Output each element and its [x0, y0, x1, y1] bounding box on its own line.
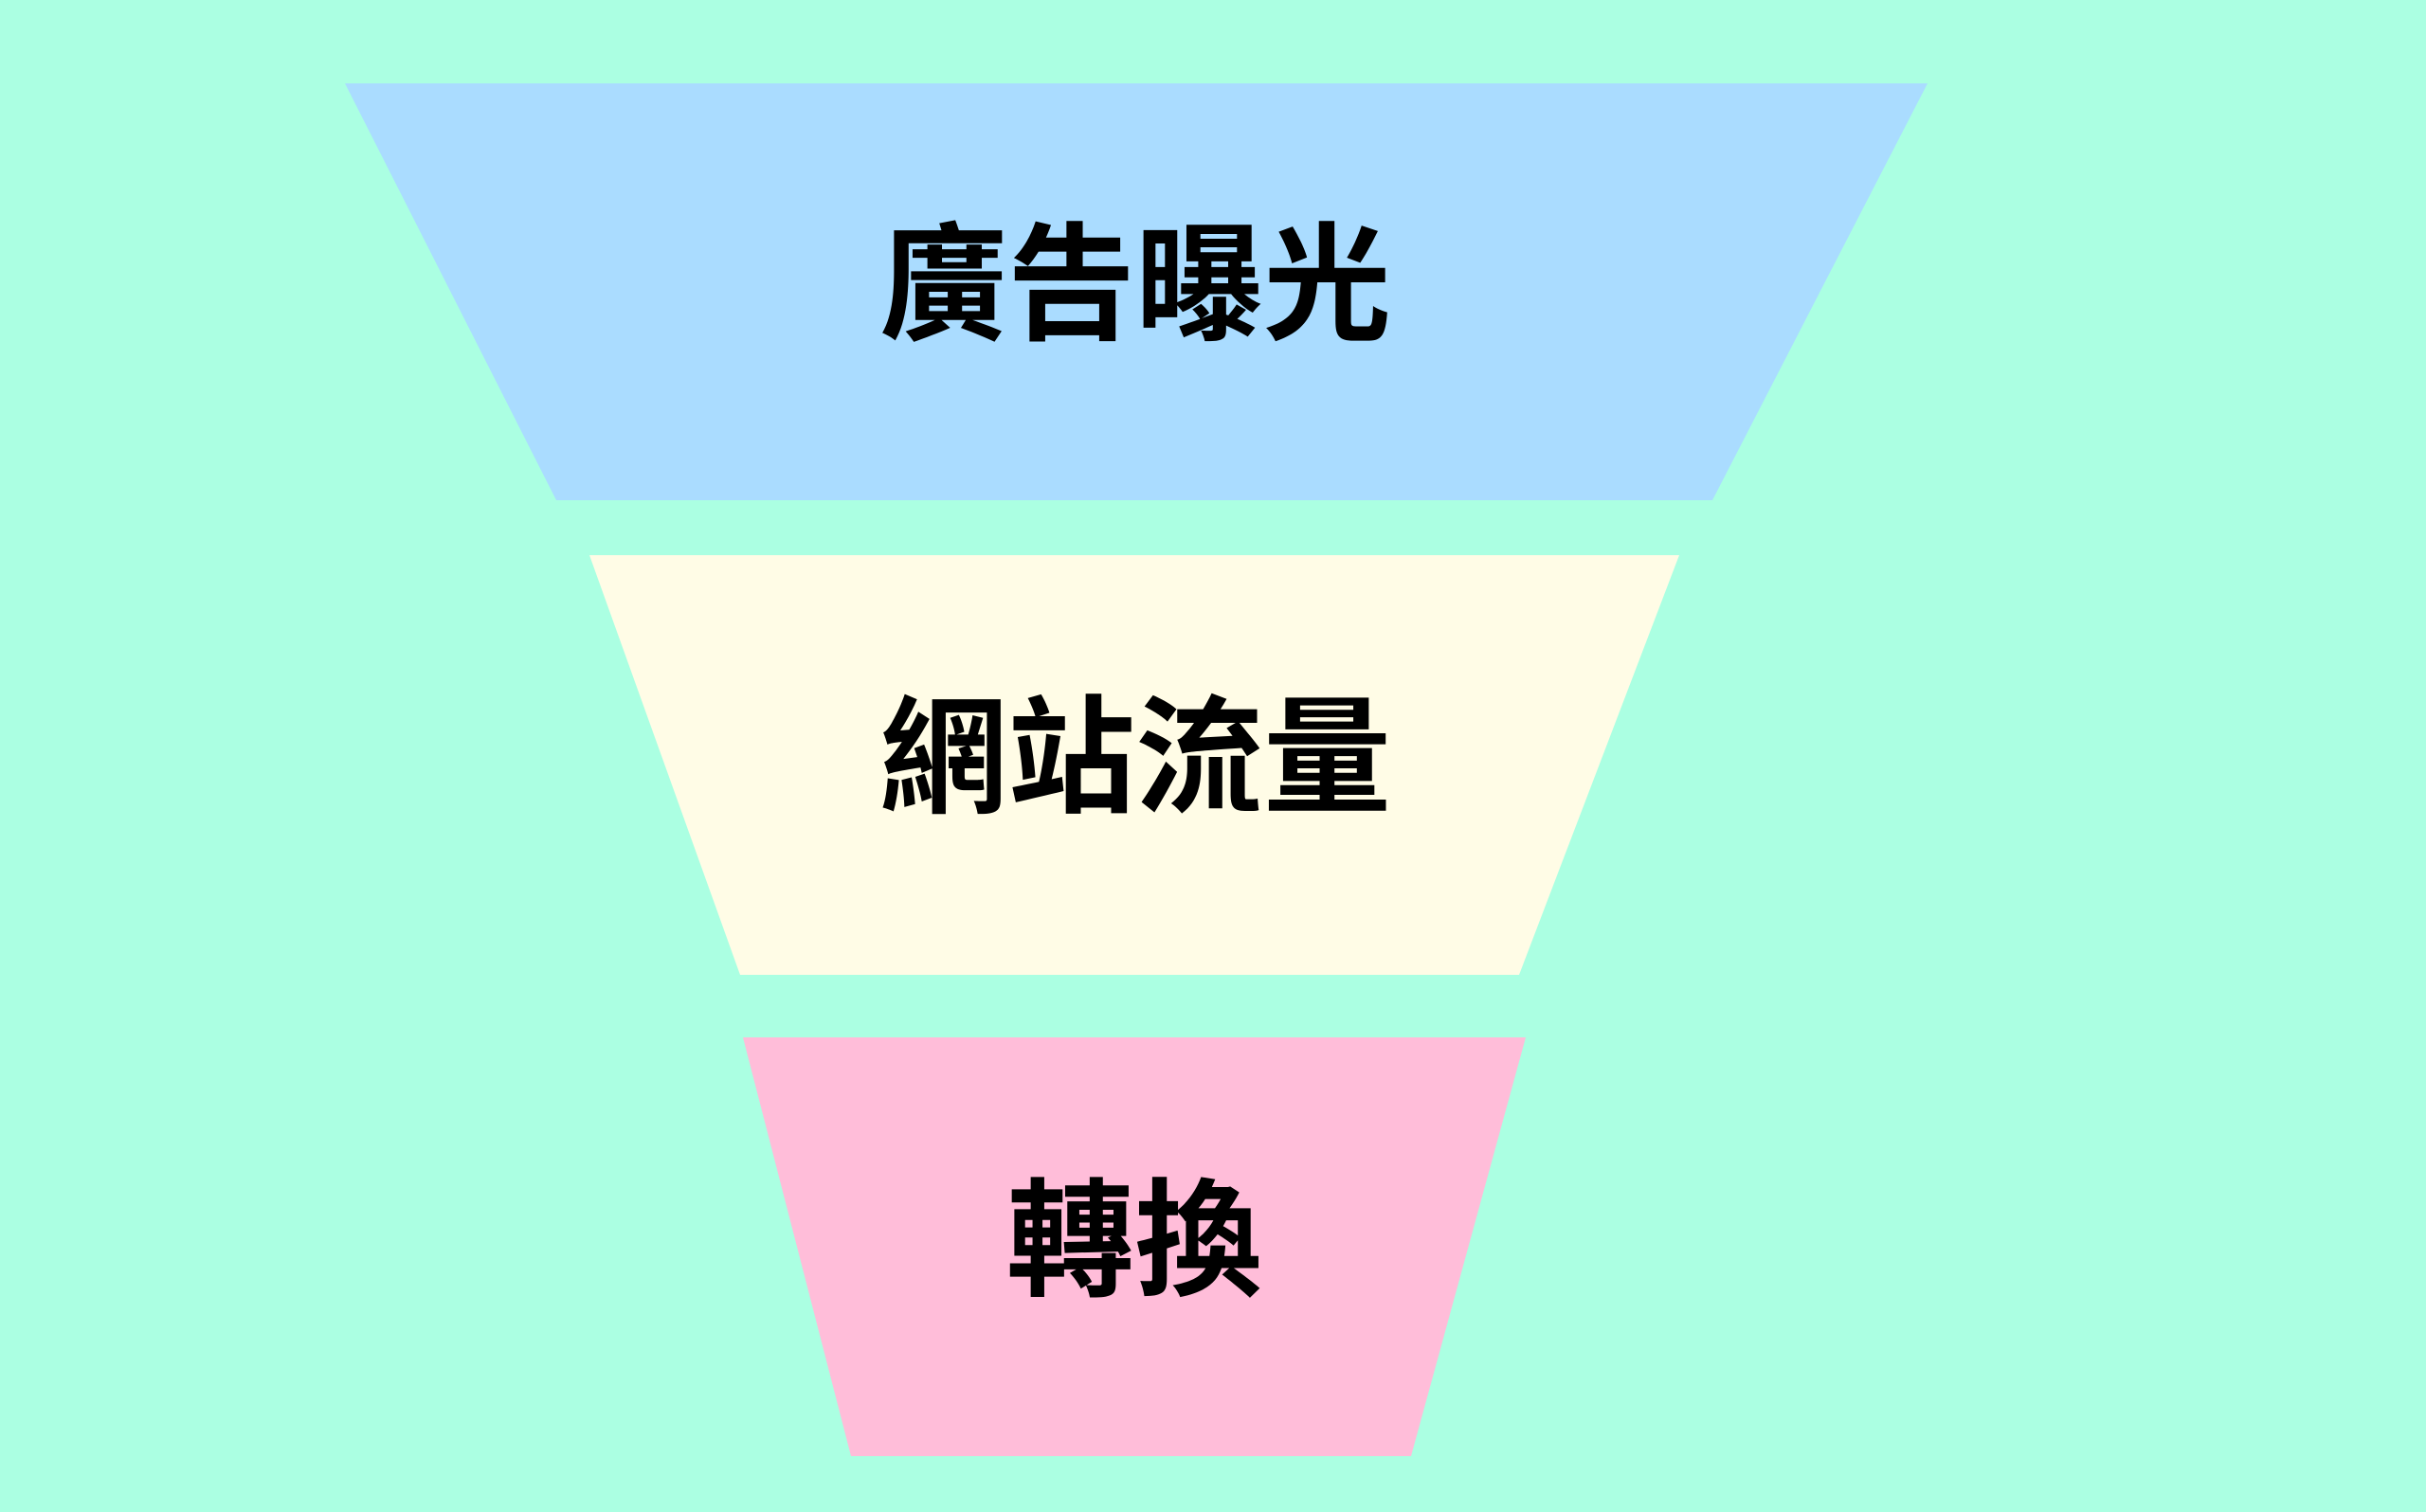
funnel stage 3: conversion — [743, 1037, 1526, 1456]
stage 1 label: 廣告曝光 — [879, 214, 1391, 357]
stage 3 label: 轉換 — [1006, 1170, 1262, 1313]
funnel stage 1: ad impressions — [345, 83, 1928, 500]
funnel stage 2: website traffic — [589, 555, 1679, 975]
stage 2 label: 網站流量 — [879, 687, 1391, 830]
stage 3 shape — [743, 1037, 1526, 1456]
stage 2 shape — [589, 555, 1679, 975]
stage 1 shape — [345, 83, 1928, 500]
